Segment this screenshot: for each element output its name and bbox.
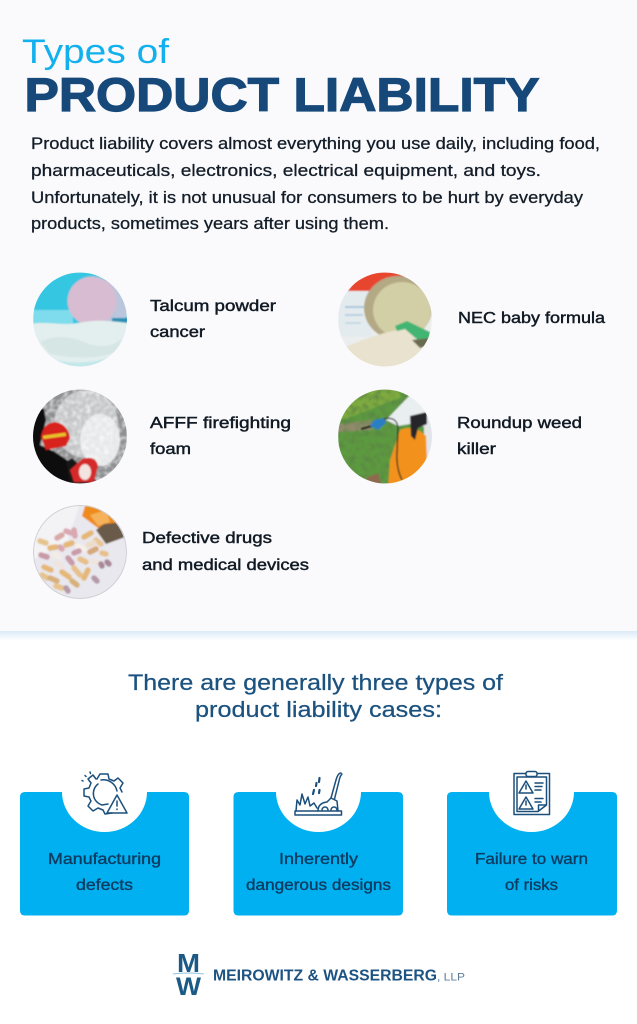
card shape [234, 792, 403, 916]
intro paragraph [31, 135, 600, 233]
intro paragraph: Unfortunately, it is not unusual for consumers to be hurt by everyday [31, 189, 584, 207]
photo: talcum powder [30, 272, 129, 370]
label: AFFF firefighting foam: AFFF firefighting [150, 415, 291, 432]
card: failure to warn of risks [447, 772, 617, 916]
photo: Roundup weed killer [338, 389, 434, 488]
card text: Inherently [279, 851, 358, 868]
section heading: There are generally three types of [128, 670, 504, 695]
icon: clipboard with warnings [514, 772, 550, 814]
label: AFFF firefighting foam [150, 415, 291, 458]
photo: NEC baby formula [338, 272, 432, 368]
logo mark: M [177, 948, 200, 978]
label: AFFF firefighting foam: foam [150, 441, 191, 458]
card text: Failure to warn [475, 851, 588, 868]
logo mark: W [176, 973, 201, 1001]
icon: gear with warning triangle [82, 772, 127, 814]
photo: AFFF firefighting foam [30, 389, 127, 484]
logo suffix: , LLP [437, 972, 465, 984]
title line: Product Liability: PRODUCT LIABILITY [24, 68, 540, 121]
card text: Manufacturing [48, 851, 161, 868]
section heading [128, 670, 504, 722]
logo mark [173, 948, 204, 1001]
intro paragraph: Product liability covers almost everything you use daily, including food, [31, 135, 600, 153]
label: talcum powder: Talcum powder [150, 298, 277, 315]
label: defective drugs and medical devices: and medical devices [142, 557, 309, 574]
logo wordmark: MEIROWITZ & WASSERBERG [213, 968, 437, 984]
icon: lawnmower and grass [295, 773, 342, 815]
card: failure to warn of risks: of risks [505, 877, 558, 894]
label: defective drugs and medical devices: Defective drugs [142, 530, 272, 547]
photo: defective drugs [33, 503, 128, 600]
label: NEC baby formula: NEC baby formula [458, 310, 605, 327]
label: Roundup weed killer [457, 415, 582, 458]
card shape [20, 792, 189, 916]
card: manufacturing defects: defects [76, 877, 133, 894]
title line: Types of: Types of [22, 33, 170, 71]
title [22, 33, 540, 121]
card: manufacturing defects [20, 772, 189, 916]
top panel background [0, 0, 637, 632]
intro paragraph: products, sometimes years after using them. [31, 215, 389, 233]
card: inherently dangerous designs [234, 773, 403, 916]
logo: Meirowitz & Wasserberg [173, 948, 465, 1001]
label: defective drugs and medical devices [142, 530, 309, 574]
label: Roundup weed killer: Roundup weed [457, 415, 582, 432]
label: Roundup weed killer: killer [457, 441, 497, 458]
panel divider band [0, 631, 637, 641]
section heading: product liability cases: [195, 697, 442, 722]
intro paragraph: pharmaceuticals, electronics, electrical equipment, and toys. [31, 162, 541, 180]
label: talcum powder [150, 298, 277, 341]
label: talcum powder: cancer [150, 324, 206, 341]
card shape [447, 792, 617, 916]
card: inherently dangerous designs: dangerous designs [246, 877, 391, 894]
